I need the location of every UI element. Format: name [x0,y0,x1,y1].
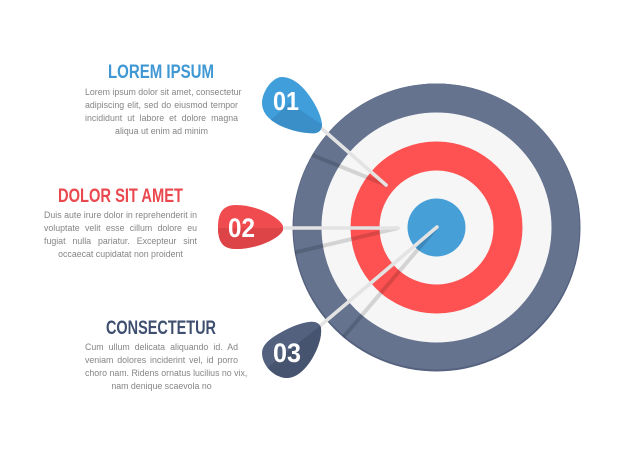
text block 2: voluptate velit esse cillum dolore eu [44,223,197,233]
text block 3: veniam dolores inciderint vel, id porro [85,355,238,365]
heading: Dolor Sit Amet: DOLOR SIT AMET [58,185,183,207]
text block 1: Lorem ipsum dolor sit amet, consectetur [85,87,241,97]
heading: Lorem Ipsum: LOREM IPSUM [108,61,214,83]
text block 2: occaecat cupidatat non proident [58,249,183,259]
dart 01: 01 [273,86,299,116]
text block 1: aliqua ut enim ad minim [115,126,208,136]
text block 3: nam denique scaevola no [111,381,212,391]
dart 01 [262,77,386,185]
text block 3: choro nam. Ridens ornatus lucilius no vix, [85,368,247,378]
text block 3 [85,342,247,391]
text block 2 [44,210,197,259]
infographic artwork: target, darts and headings [59,64,580,378]
text block 3: Cum ullum delicata aliquando id. Ad [85,342,238,352]
dart 03: 03 [273,338,301,368]
heading: Consectetur: CONSECTETUR [106,318,216,339]
text block 1: incididunt ut labore et dolore magna [85,113,238,123]
dart 02: 02 [228,213,255,243]
text block 1 [85,87,242,136]
text block 1: adipiscing elit, sed do eiusmod tempor [85,100,238,110]
dart shadows [294,153,438,338]
dart 02 [215,205,398,252]
target [292,84,580,372]
dart 03 [262,227,437,385]
text block 2: fugiat nulla pariatur. Excepteur sint [44,236,197,246]
text block 2: Duis aute irure dolor in reprehenderit in [44,210,197,220]
